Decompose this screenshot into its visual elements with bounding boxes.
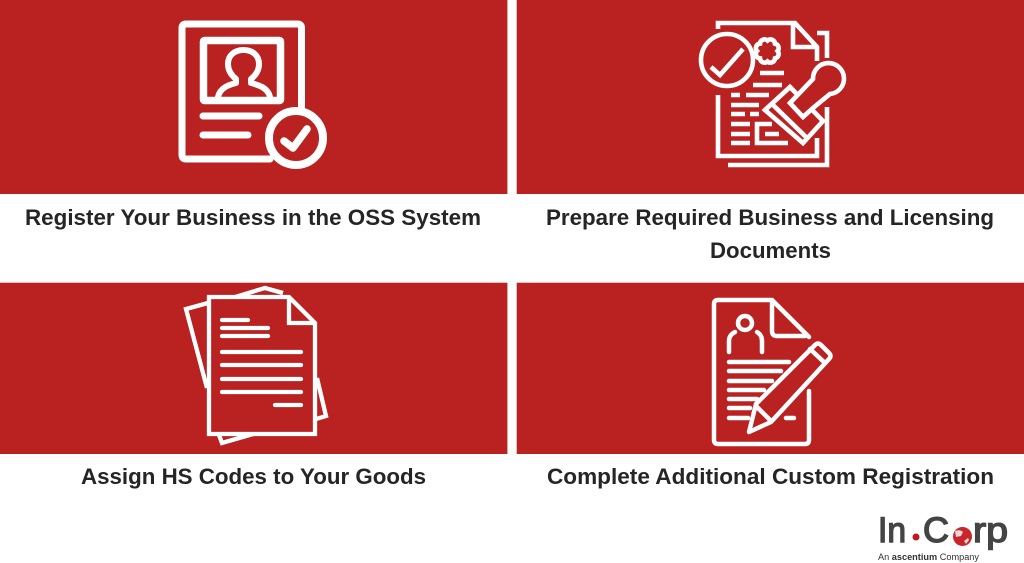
logo: InCorp	[878, 511, 1008, 562]
logo: InCorp: In	[878, 511, 906, 550]
panel: register business	[0, 0, 507, 194]
panel: custom registration	[517, 283, 1024, 454]
panel: prepare documents	[517, 0, 1024, 194]
heading: custom registration: Complete Additional Custom Registration	[547, 464, 994, 489]
panel: assign HS codes	[0, 283, 507, 454]
icon: profile document with check mark	[182, 24, 323, 165]
icon: documents with seal and stamp	[701, 23, 844, 165]
heading: prepare documents	[546, 205, 994, 263]
logo: InCorp: An ascentium Company	[878, 552, 979, 562]
icon: stacked paper sheets	[186, 288, 326, 443]
heading: register business: Register Your Business in the OSS System	[25, 205, 481, 230]
logo: InCorp: rp	[973, 511, 1008, 550]
heading: assign HS codes: Assign HS Codes to Your Goods	[81, 464, 426, 489]
icon: globe	[953, 527, 972, 546]
logo: InCorp: C	[923, 511, 949, 550]
heading: prepare documents: Prepare Required Business and Licensing	[546, 205, 994, 230]
icon: form with pencil	[714, 300, 830, 444]
heading: prepare documents: Documents	[710, 238, 831, 263]
